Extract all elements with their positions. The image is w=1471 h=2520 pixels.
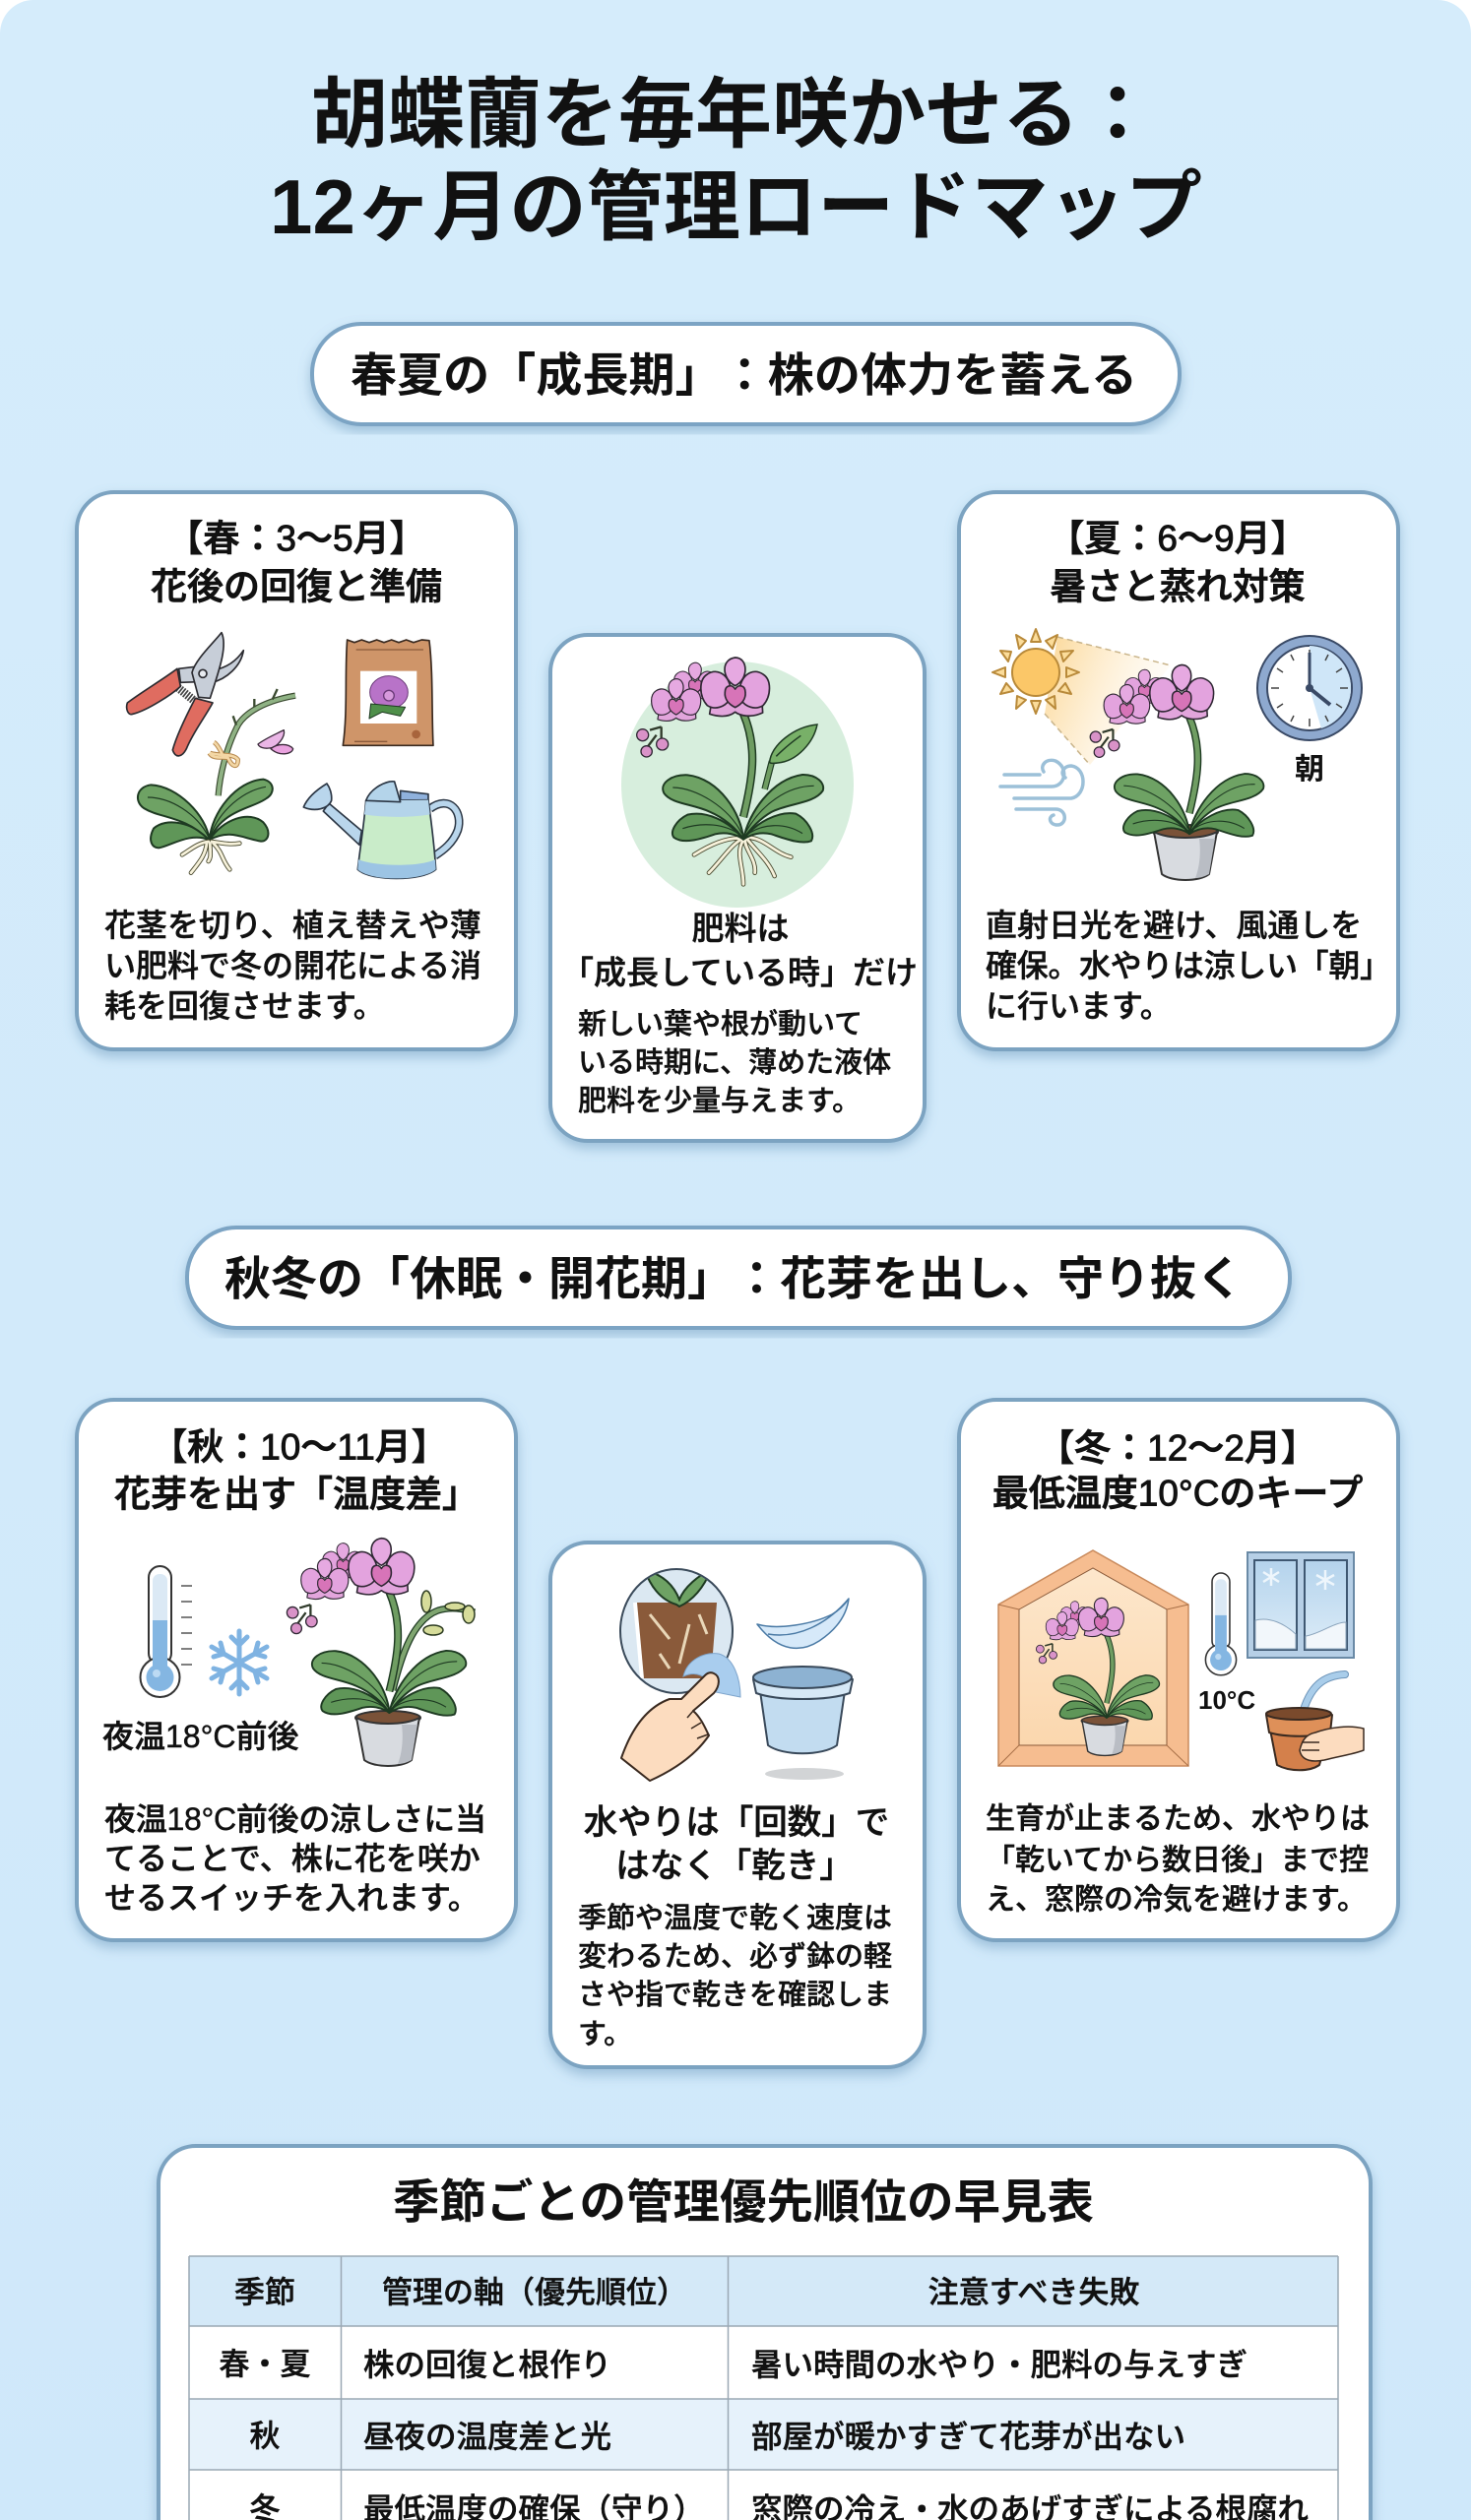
heading: summer: [1048, 518, 1308, 606]
icon: snowflake: [212, 1631, 267, 1694]
section heading: autumn and winter: [187, 1228, 1290, 1328]
body text: autumn: てることで、株に花を咲か: [104, 1841, 480, 1876]
row: autumn: [250, 2419, 1185, 2454]
body text: autumn: [104, 1801, 486, 1916]
heading: fertilizer: 肥料は: [691, 910, 790, 947]
icon: blue pot: [753, 1667, 853, 1753]
label: morning: 朝: [1295, 754, 1324, 786]
icon: blue cutaway marker: [683, 1654, 740, 1697]
icon: soil check lens: [620, 1569, 733, 1693]
row: spring and summer: 暑い時間の水やり・肥料の与えすぎ: [751, 2347, 1247, 2382]
body text: winter: [986, 1803, 1370, 1916]
heading: winter: 【冬：12～2月】: [1038, 1427, 1317, 1469]
body text: spring: 耗を回復させます。: [104, 988, 385, 1024]
body text: fertilizer: 肥料を少量与えます。: [578, 1085, 861, 1117]
label: ten degrees: 10°C: [1198, 1685, 1255, 1715]
body text: spring: い肥料で冬の開花による消: [104, 948, 481, 983]
icon: pruning shears: [127, 633, 243, 756]
icon: plant after cutting the stem: [138, 689, 295, 873]
row: winter: [250, 2491, 1309, 2520]
row: spring and summer: 株の回復と根作り: [363, 2347, 611, 2382]
table header: [234, 2276, 1139, 2309]
icon: watering can: [303, 782, 459, 878]
icon: snowy window: [1247, 1552, 1354, 1658]
section heading: autumn and winter: 秋冬の「休眠・開花期」：花芽を出し、守り抜く: [224, 1252, 1243, 1305]
panel: priority table: [159, 2146, 1371, 2520]
body text: fertilizer: いる時期に、薄めた液体: [578, 1046, 891, 1079]
body text: winter: 「乾いてから数日後」まで控: [986, 1845, 1369, 1876]
section heading: spring and summer: [312, 324, 1180, 424]
body text: watering: [578, 1902, 892, 2050]
heading: watering: [584, 1804, 889, 1885]
title: [270, 71, 1202, 250]
body text: watering: 季節や温度で乾く速度は: [578, 1902, 892, 1934]
panel: spring: [77, 492, 516, 1049]
body text: watering: す。: [578, 2019, 632, 2050]
heading: summer: 暑さと蒸れ対策: [1050, 567, 1306, 606]
heading: winter: [992, 1427, 1363, 1514]
icon: wind: [1000, 760, 1083, 825]
icon: clock: [1257, 636, 1362, 786]
panel: autumn: [77, 1400, 516, 1940]
shadow under pot: [765, 1768, 844, 1780]
heading: watering: 水やりは「回数」で: [584, 1804, 889, 1842]
icon: orchid with roots on green circle: [621, 658, 854, 908]
body text: fertilizer: [578, 1008, 891, 1117]
body text: winter: え、窓際の冷気を避けます。: [986, 1884, 1367, 1916]
body text: spring: [104, 908, 481, 1024]
heading: summer: 【夏：6～9月】: [1048, 518, 1308, 559]
icon: thermometer: [140, 1566, 192, 1697]
heading: autumn: 花芽を出す「温度差」: [114, 1475, 479, 1514]
panel: fertilizer: [550, 635, 925, 1141]
title: 胡蝶蘭を毎年咲かせる：: [311, 71, 1156, 158]
body text: watering: 変わるため、必ず鉢の軽: [578, 1940, 892, 1973]
row: spring and summer: [219, 2347, 1247, 2382]
icon: watering a terracotta pot: [1266, 1674, 1364, 1770]
panel: winter: [959, 1400, 1398, 1940]
table header: 注意すべき失敗: [928, 2276, 1139, 2309]
panel: watering: [550, 1543, 925, 2067]
icon: house with orchid: [998, 1550, 1188, 1766]
body text: summer: に行います。: [986, 988, 1172, 1024]
section heading: spring and summer: 春夏の「成長期」：株の体力を蓄える: [351, 348, 1137, 402]
row: spring and summer: 春・夏: [219, 2347, 311, 2382]
table: [189, 2256, 1338, 2520]
icon: potted orchid: [1090, 664, 1263, 880]
icon: fertilizer bag: [343, 640, 433, 745]
icon: thermometer: [1205, 1573, 1237, 1675]
body text: autumn: せるスイッチを入れます。: [104, 1880, 480, 1916]
icon: feather: [757, 1599, 849, 1648]
label: night temperature: 夜温18°C前後: [102, 1719, 299, 1754]
heading: fertilizer: 「成長している時」だけ: [561, 955, 918, 990]
heading: watering: はなく「乾き」: [615, 1848, 854, 1885]
body text: watering: さや指で乾きを確認しま: [578, 1979, 892, 2011]
row: autumn: 秋: [250, 2420, 280, 2453]
icon: sunlight beam: [992, 629, 1171, 765]
body text: summer: 確保。水やりは涼しい「朝」: [986, 948, 1391, 983]
body text: summer: [986, 908, 1391, 1024]
panel: summer: [959, 492, 1398, 1049]
heading: spring: 【春：3～5月】: [166, 518, 426, 559]
heading: winter: 最低温度10°Cのキープ: [992, 1473, 1363, 1514]
body text: fertilizer: 新しい葉や根が動いて: [578, 1008, 863, 1040]
icon: hand pointing: [621, 1672, 719, 1781]
heading: spring: [151, 518, 442, 606]
row: autumn: 部屋が暖かすぎて花芽が出ない: [751, 2419, 1185, 2454]
table header: 管理の軸（優先順位）: [382, 2276, 687, 2309]
table header: 季節: [234, 2276, 295, 2309]
heading: autumn: [114, 1427, 479, 1514]
body text: summer: 直射日光を避け、風通しを: [986, 908, 1362, 943]
table title: 季節ごとの管理優先順位の早見表: [393, 2177, 1094, 2229]
icon: potted orchid with flower spike: [287, 1539, 475, 1766]
title: 12ヶ月の管理ロードマップ: [270, 163, 1202, 250]
heading: autumn: 【秋：10～11月】: [151, 1427, 448, 1467]
body text: winter: 生育が止まるため、水やりは: [986, 1803, 1370, 1835]
body text: spring: 花茎を切り、植え替えや薄: [104, 908, 481, 943]
heading: fertilizer: [561, 910, 918, 990]
body text: autumn: 夜温18°C前後の涼しさに当: [104, 1801, 486, 1837]
heading: spring: 花後の回復と準備: [151, 567, 442, 606]
row: autumn: 昼夜の温度差と光: [363, 2419, 611, 2454]
